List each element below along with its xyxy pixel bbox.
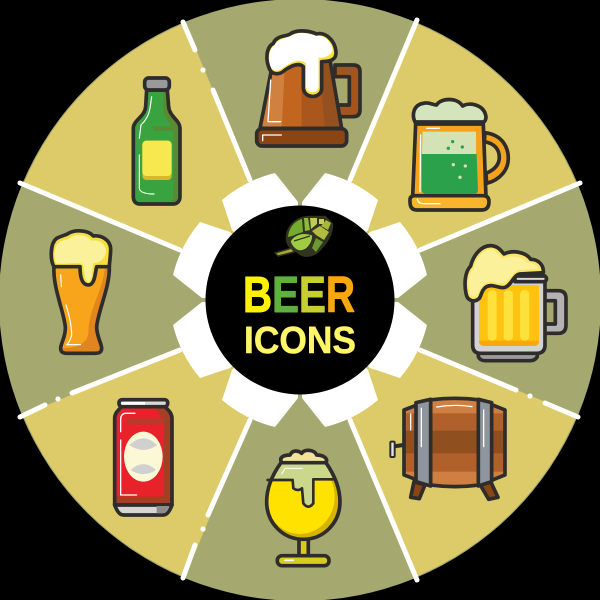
icon: hop cone — [275, 217, 332, 256]
icon: tulip goblet — [265, 450, 343, 566]
icon: glass beer mug — [465, 246, 566, 361]
icon: brown stein — [257, 31, 360, 146]
centre black circle — [206, 206, 394, 394]
title: ICONS: ICONS — [244, 320, 356, 362]
title: BEER: BEER — [243, 266, 355, 323]
icon: green bottle — [133, 78, 182, 205]
icon: wooden barrel — [390, 398, 510, 499]
icon: red can — [113, 400, 172, 515]
icon: pint glass — [51, 231, 112, 357]
icon: green tankard — [410, 99, 508, 210]
white gear around centre — [173, 173, 427, 427]
